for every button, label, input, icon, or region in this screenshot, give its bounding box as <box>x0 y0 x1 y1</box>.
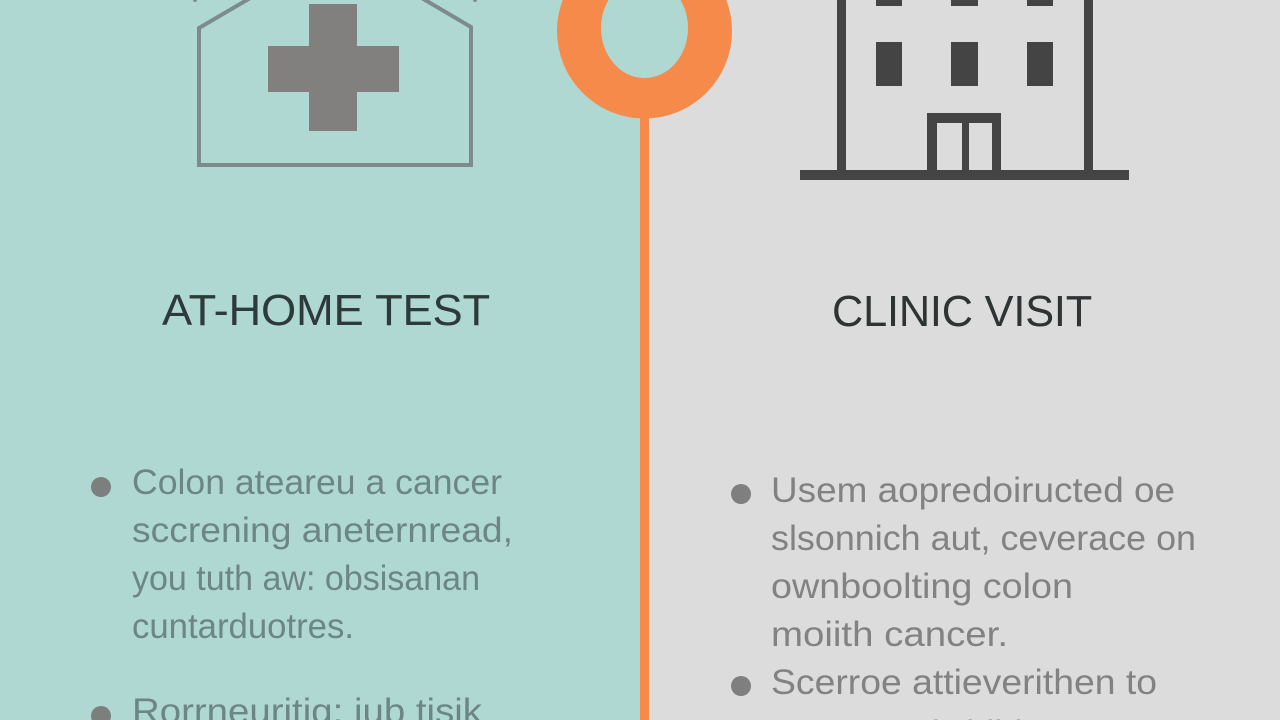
bullet list: at-home test: sccrening aneternread, <box>132 511 513 550</box>
bullet list: clinic visit: slsonnich aut, ceverace on <box>771 519 1196 558</box>
bullet list: at-home test <box>91 463 513 720</box>
divider: orange line and ring <box>557 0 732 720</box>
bullet list: at-home test: Colon ateareu a cancer <box>132 463 502 502</box>
panel: at-home test <box>0 0 644 720</box>
bullet list: clinic visit: Usem aopredoiructed oe <box>771 471 1175 510</box>
bullet list: clinic visit: ownboolting colon <box>771 567 1073 606</box>
bullet list: at-home test: cuntarduotres. <box>132 607 354 646</box>
bullet list: clinic visit <box>731 471 1196 720</box>
icon: clinic building <box>800 0 1129 180</box>
panel: clinic visit <box>644 0 1280 720</box>
heading: clinic visit: CLINIC VISIT <box>832 287 1092 336</box>
bullet list: at-home test: you tuth aw: obsisanan <box>132 559 480 598</box>
icon: house with medical cross <box>193 0 477 165</box>
bullet list: clinic visit: moiith cancer. <box>771 615 1008 654</box>
heading: at-home test: AT-HOME TEST <box>162 286 490 335</box>
bullet list: clinic visit: Scerroe attieverithen to <box>771 663 1157 702</box>
